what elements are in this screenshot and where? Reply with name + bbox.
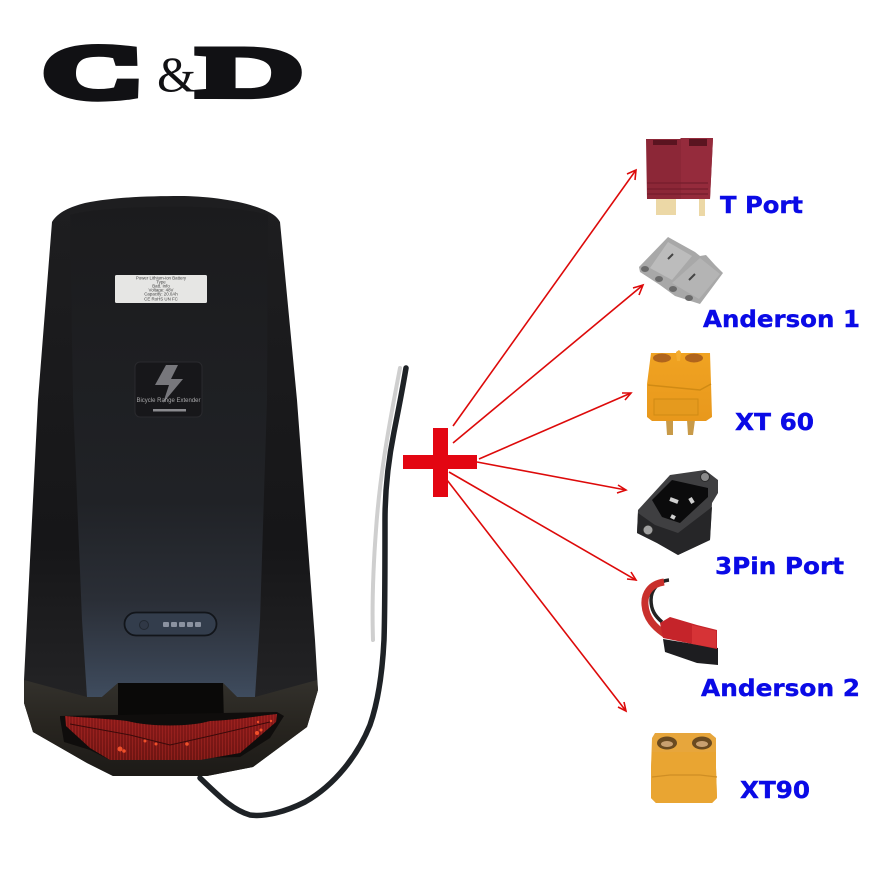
brand badge with lightning: Bicycle Range Extender (136, 398, 201, 404)
rating label: Capacity: 20.0Ah (144, 292, 178, 296)
rating label: Type (156, 280, 166, 284)
connector: XT 60 (647, 350, 712, 435)
red tail light (60, 712, 284, 760)
label: Anderson 1: Anderson 1 (703, 307, 860, 333)
arrow to Anderson 2 (449, 472, 636, 580)
brand badge with lightning (135, 362, 202, 417)
label: Anderson 2: Anderson 2 (701, 676, 860, 702)
rating label (115, 275, 207, 303)
rating label: CE RoHS UN FC (144, 296, 178, 302)
label: XT 60: XT 60 (735, 410, 814, 436)
logo ampersand: & (157, 46, 196, 102)
arrow to 3Pin Port (477, 462, 626, 493)
arrow to XT90 (447, 480, 626, 711)
label: T Port: T Port (720, 193, 803, 219)
red arrows (447, 170, 643, 711)
connector: XT90 (651, 733, 717, 803)
battery side shell (24, 196, 318, 776)
rating label: Voltage: 48V (149, 288, 174, 292)
logo letter C: C (48, 34, 137, 112)
label: 3Pin Port: 3Pin Port (715, 554, 844, 580)
label: XT90: XT90 (740, 778, 810, 804)
arrow to Anderson 1 (453, 285, 643, 443)
arrow to T Port (453, 170, 636, 426)
logo: C&D (48, 34, 299, 112)
battery pack (24, 196, 318, 776)
battery lower base (24, 680, 318, 776)
connector: Anderson 1 (639, 237, 723, 304)
battery centre panel (70, 207, 268, 697)
connector: T Port (646, 138, 713, 216)
rating label: Batt. Info (152, 284, 170, 288)
logo letter D: D (198, 34, 299, 110)
connector: Anderson 2 (645, 580, 718, 665)
battery cable (200, 368, 406, 815)
plus sign (403, 428, 477, 497)
rating label: Power Lithium-ion Battery (136, 276, 187, 280)
connector: 3Pin Port (637, 470, 718, 555)
arrow to XT 60 (479, 393, 631, 459)
charge indicator (124, 612, 216, 636)
battery handle notch (118, 683, 224, 730)
